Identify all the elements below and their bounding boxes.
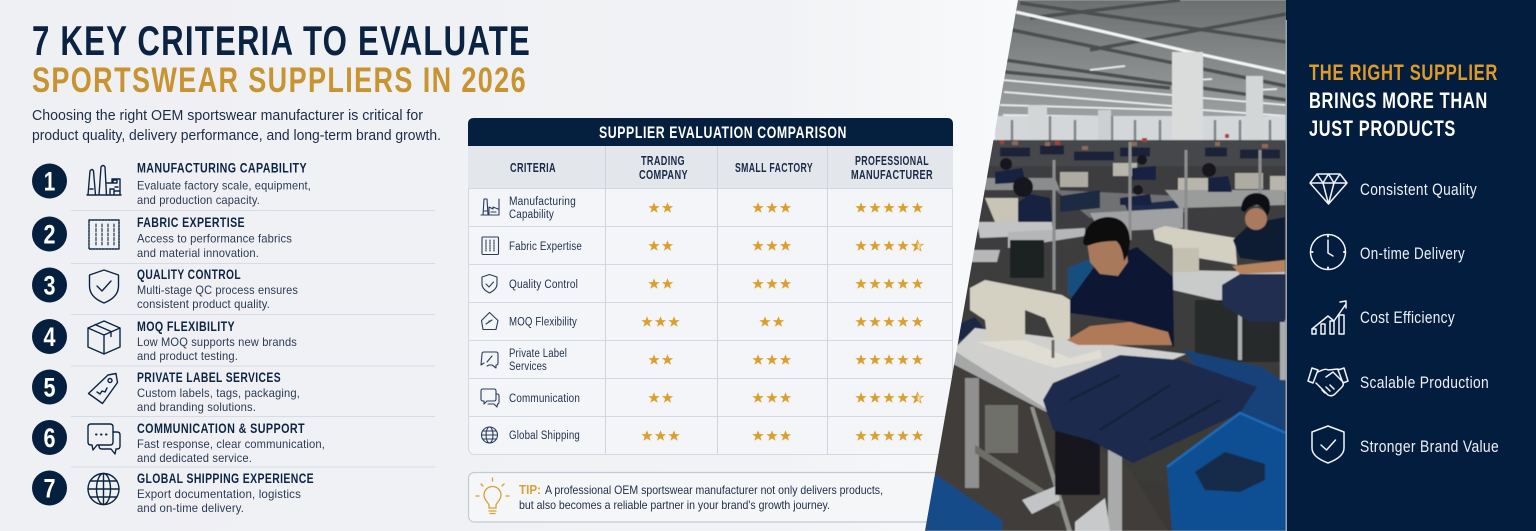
row: fabric expertise xyxy=(482,237,923,254)
intro text: product quality, delivery performance, and long-term brand growth. xyxy=(32,128,441,144)
benefits heading xyxy=(1309,60,1498,141)
table column headers: MANUFACTURER xyxy=(851,168,933,182)
criterion 4 xyxy=(32,319,297,363)
right machine xyxy=(1152,226,1238,266)
criterion 1: Evaluate factory scale, equipment, xyxy=(137,178,311,192)
table column headers: PROFESSIONAL xyxy=(855,154,929,168)
windows band xyxy=(995,116,1290,142)
panel: right navy benefits xyxy=(1286,0,1536,531)
benefit: stronger brand value: Stronger Brand Value xyxy=(1360,437,1499,456)
table title bar: SUPPLIER EVALUATION COMPARISON xyxy=(599,124,847,142)
row: quality control: Quality Control xyxy=(509,279,578,291)
row: private label services xyxy=(481,348,923,373)
title: SPORTSWEAR SUPPLIERS IN 2026 xyxy=(32,61,527,100)
row: private label services: Services xyxy=(509,361,547,373)
row: global shipping xyxy=(482,427,923,443)
table column headers: TRADING xyxy=(641,154,685,168)
criterion 5: PRIVATE LABEL SERVICES xyxy=(137,370,281,385)
factory photo illustration xyxy=(920,0,1290,531)
criterion 6: 6 xyxy=(44,423,56,453)
criterion 3 xyxy=(32,267,298,311)
title xyxy=(32,17,531,100)
panel: supplier evaluation comparison table xyxy=(468,118,953,454)
criterion 2: and material innovation. xyxy=(137,246,259,260)
main sewing machine xyxy=(970,280,1070,347)
benefit: cost efficiency: Cost Efficiency xyxy=(1360,308,1455,327)
right table xyxy=(1173,270,1285,305)
row: private label services: Private Label xyxy=(509,348,567,360)
criterion 7: Export documentation, logistics xyxy=(137,487,301,501)
criterion 1: MANUFACTURING CAPABILITY xyxy=(137,160,307,176)
row: manufacturing capability: Manufacturing xyxy=(509,196,576,208)
main worker xyxy=(1070,247,1174,347)
criterion 2 xyxy=(32,215,292,260)
criterion 5 xyxy=(32,370,300,414)
right worker xyxy=(1233,217,1285,264)
criterion 3: 3 xyxy=(44,270,56,300)
row: MOQ flexibility xyxy=(482,312,923,330)
criterion 7 xyxy=(32,470,314,515)
big table xyxy=(953,328,1186,412)
title: 7 KEY CRITERIA TO EVALUATE xyxy=(32,17,531,64)
criterion 4: 4 xyxy=(44,322,56,352)
row: quality control xyxy=(482,274,923,293)
benefit: cost efficiency xyxy=(1312,301,1455,334)
benefit: scalable production: Scalable Production xyxy=(1360,373,1489,392)
blue crate back xyxy=(1183,350,1285,440)
criterion 6: COMMUNICATION & SUPPORT xyxy=(137,421,305,436)
small left garment xyxy=(958,317,984,340)
row: manufacturing capability xyxy=(481,196,923,221)
criterion 4: and product testing. xyxy=(137,349,238,363)
criterion 4: MOQ FLEXIBILITY xyxy=(137,319,235,334)
poles xyxy=(1054,142,1260,290)
pillars xyxy=(1171,51,1204,117)
criterion 1: 1 xyxy=(44,166,55,196)
table title bar xyxy=(468,118,953,146)
benefit: scalable production xyxy=(1308,368,1489,396)
criterion 5: Custom labels, tags, packaging, xyxy=(137,386,300,400)
benefit: on-time delivery xyxy=(1310,234,1465,270)
benefit: consistent quality xyxy=(1310,174,1477,204)
intro text: Choosing the right OEM sportswear manufacturer is critical for xyxy=(32,108,423,124)
row: communication xyxy=(481,389,923,407)
criterion 7: and on-time delivery. xyxy=(137,501,244,515)
criterion 3: consistent product quality. xyxy=(137,297,270,311)
criterion 3: QUALITY CONTROL xyxy=(137,267,241,282)
table column headers: SMALL FACTORY xyxy=(735,161,813,175)
left worker xyxy=(1013,177,1033,197)
row: global shipping: Global Shipping xyxy=(509,430,580,442)
callout: tip xyxy=(468,472,948,522)
right garments xyxy=(1222,274,1285,322)
row: manufacturing capability: Capability xyxy=(509,209,554,221)
page background xyxy=(0,0,1030,531)
blue bin mid xyxy=(1068,258,1092,296)
table column headers: CRITERIA xyxy=(510,161,556,175)
row: fabric expertise: Fabric Expertise xyxy=(509,241,582,253)
benefit: on-time delivery: On-time Delivery xyxy=(1360,244,1465,263)
icon: light bulb xyxy=(476,478,509,514)
panel: seven criteria list xyxy=(32,160,435,515)
row: MOQ flexibility: MOQ Flexibility xyxy=(509,316,577,328)
criterion 1: and production capacity. xyxy=(137,193,260,207)
callout: tip: TIP: xyxy=(519,482,541,497)
benefit: stronger brand value xyxy=(1312,426,1499,463)
criterion 1 xyxy=(32,160,311,207)
mid rows xyxy=(985,178,1060,190)
criterion 4: Low MOQ supports new brands xyxy=(137,335,297,349)
garment pile xyxy=(1043,355,1257,463)
criterion 7: 7 xyxy=(44,474,56,504)
callout: tip: but also becomes a reliable partner in your brand's growth journey. xyxy=(519,498,830,512)
table column headers xyxy=(510,154,933,182)
criterion 6 xyxy=(32,420,325,465)
lower floor xyxy=(920,142,1290,531)
distant workers xyxy=(990,140,1286,166)
callout: tip: A professional OEM sportswear manufacturer not only delivers products, xyxy=(545,483,883,497)
intro text xyxy=(32,108,441,144)
criterion 2: 2 xyxy=(44,220,56,250)
criterion 3: Multi-stage QC process ensures xyxy=(137,283,298,297)
row: communication: Communication xyxy=(509,393,580,405)
criterion 6: and dedicated service. xyxy=(137,451,252,465)
criterion 5: 5 xyxy=(44,372,56,402)
table column headers: COMPANY xyxy=(639,168,688,182)
criterion 2: Access to performance fabrics xyxy=(137,232,292,246)
criterion 6: Fast response, clear communication, xyxy=(137,437,325,451)
criterion 5: and branding solutions. xyxy=(137,400,256,414)
criterion 2: FABRIC EXPERTISE xyxy=(137,215,245,230)
benefit: consistent quality: Consistent Quality xyxy=(1360,180,1477,199)
benefits heading: JUST PRODUCTS xyxy=(1309,116,1456,141)
small workers xyxy=(1000,158,1012,170)
criterion 7: GLOBAL SHIPPING EXPERIENCE xyxy=(137,471,314,486)
blue crates xyxy=(1167,413,1286,531)
ceiling xyxy=(998,0,1286,116)
under table xyxy=(925,364,1168,531)
